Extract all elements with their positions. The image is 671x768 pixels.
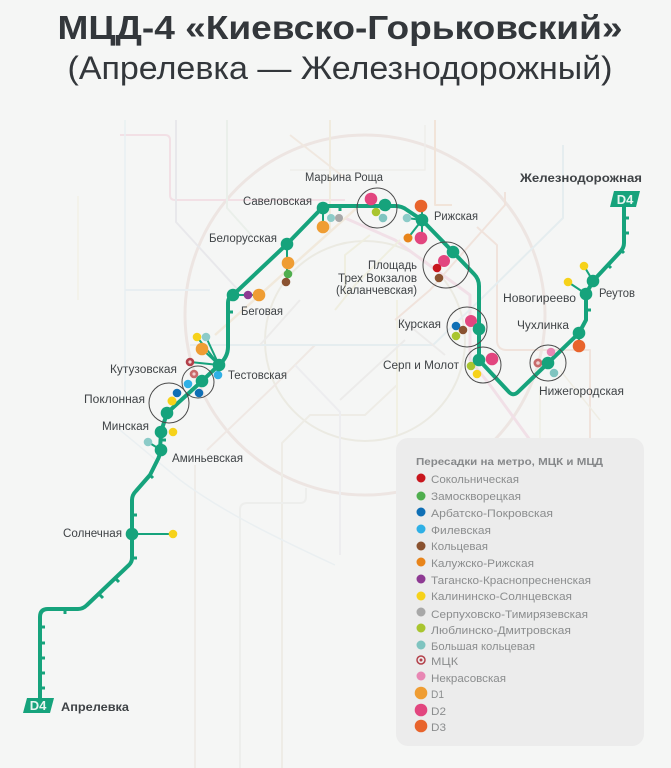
station labels: Рижская xyxy=(434,211,478,223)
legend items: Замоскворецкая xyxy=(431,491,521,503)
station labels: Тестовская xyxy=(228,370,287,382)
legend items: Большая кольцевая xyxy=(431,641,535,653)
station labels: Белорусская xyxy=(209,233,277,245)
legend items: Филевская xyxy=(431,525,491,537)
station labels: Нижегородская xyxy=(539,386,624,398)
station labels: Трех Вокзалов xyxy=(338,273,417,285)
legend items: МЦК xyxy=(431,656,459,668)
station labels: Курская xyxy=(398,319,441,331)
station labels: Аминьевская xyxy=(172,453,243,465)
station labels xyxy=(61,172,642,714)
legend panel xyxy=(396,438,644,746)
legend items: Кольцевая xyxy=(431,541,488,553)
stations xyxy=(126,199,599,540)
legend items: D1 xyxy=(431,689,444,701)
station labels: Беговая xyxy=(241,306,283,318)
transfer dots xyxy=(144,193,588,538)
legend items: Арбатско-Покровская xyxy=(431,508,553,520)
D4 badges: D4 xyxy=(617,192,634,207)
station labels: Савеловская xyxy=(243,196,312,208)
station labels: Железнодорожная xyxy=(519,173,642,185)
legend items: D2 xyxy=(431,706,446,718)
station labels: Новогиреево xyxy=(503,293,576,305)
legend items: Некрасовская xyxy=(431,673,506,685)
legend items: Калининско-Солнцевская xyxy=(431,591,572,603)
station labels: Реутов xyxy=(599,288,635,300)
legend items: D3 xyxy=(431,722,446,734)
station labels: Марьина Роща xyxy=(305,172,384,184)
legend items: Люблинско-Дмитровская xyxy=(431,625,571,637)
legend items xyxy=(415,474,591,734)
legend items: Таганско-Краснопресненская xyxy=(431,575,591,587)
D4 badges: D4 xyxy=(30,698,47,713)
station labels: (Каланчевская) xyxy=(336,285,417,297)
station labels: Площадь xyxy=(368,260,417,272)
station labels: Солнечная xyxy=(63,528,122,540)
legend items: Калужско-Рижская xyxy=(431,558,534,570)
station labels: Минская xyxy=(102,421,149,433)
D4 badges xyxy=(23,191,640,713)
legend items: Сокольническая xyxy=(431,474,519,486)
station labels: Апрелевка xyxy=(61,702,130,714)
interchange rings xyxy=(149,188,566,423)
title: (Апрелевка — Железнодорожный) xyxy=(68,50,612,86)
station labels: Поклонная xyxy=(84,394,145,406)
title xyxy=(58,9,622,86)
legend heading: Пересадки на метро, МЦК и МЦД xyxy=(416,456,604,468)
legend items: Серпуховско-Тимирязевская xyxy=(431,609,588,621)
station labels: Серп и Молот xyxy=(383,360,460,372)
D4 line route xyxy=(40,206,629,700)
transfer connector lines xyxy=(132,206,593,534)
station labels: Чухлинка xyxy=(517,320,570,332)
title: МЦД-4 «Киевско-Горьковский» xyxy=(58,9,622,46)
station labels: Кутузовская xyxy=(110,364,177,376)
